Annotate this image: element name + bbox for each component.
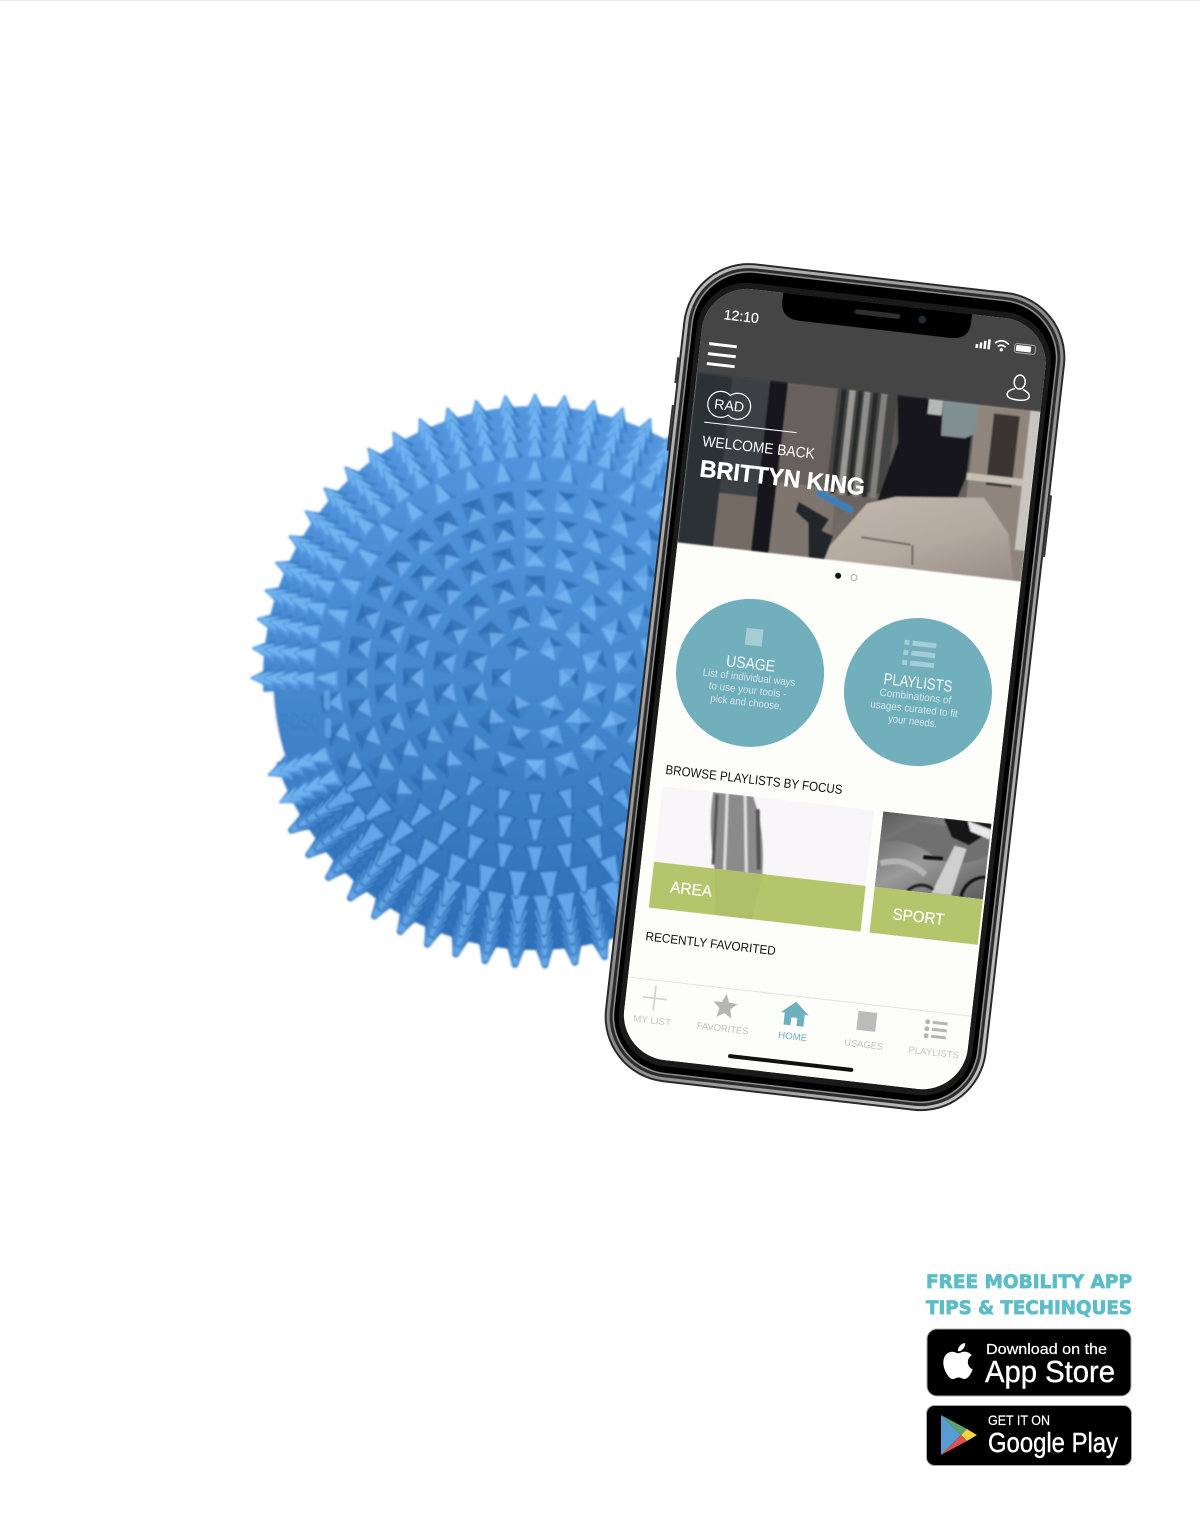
playlists circle — [844, 618, 992, 766]
tab: usages — [844, 1010, 887, 1053]
home indicator — [728, 1054, 853, 1072]
wifi icon — [994, 340, 1009, 351]
playlists heading: PLAYLISTS — [883, 671, 953, 696]
user name: BRITTYN KING — [698, 455, 866, 501]
tab: favorites: FAVORITES — [696, 1021, 749, 1037]
tab: home: HOME — [778, 1030, 808, 1044]
hamburger menu icon — [707, 342, 737, 368]
muscle illustration — [710, 792, 764, 874]
welcome text: WELCOME BACK — [701, 433, 816, 463]
recently favorited heading: RECENTLY FAVORITED — [645, 929, 777, 958]
signal icon — [975, 338, 991, 349]
speaker and camera — [854, 308, 927, 324]
badge large text: App Store — [985, 1354, 1115, 1389]
carousel dots — [835, 572, 857, 581]
playlists description — [870, 688, 958, 728]
usage description — [703, 668, 795, 710]
side buttons — [660, 357, 1063, 557]
playlists description: Combinations of — [879, 687, 952, 707]
sport green bar — [869, 887, 983, 945]
app promo heading — [926, 1271, 1132, 1319]
tab: favorites — [697, 994, 748, 1034]
ring at radius 178 — [347, 490, 723, 871]
playlists description: your needs. — [888, 713, 938, 730]
tab: my list: MY LIST — [633, 1013, 672, 1029]
playlists icon — [902, 640, 937, 668]
ring at radius 122 — [403, 546, 667, 815]
phone frame — [598, 256, 1072, 1118]
area card — [648, 786, 875, 933]
tab bar divider — [628, 977, 972, 1017]
upper and left cones — [250, 394, 713, 814]
cyclist photo — [879, 818, 992, 897]
screen background — [619, 284, 1051, 1094]
inner ring pyramids — [433, 576, 637, 780]
tab: playlists: PLAYLISTS — [908, 1045, 960, 1061]
profile icon — [1007, 374, 1032, 401]
App Store badge — [927, 1329, 1131, 1396]
usage heading: USAGE — [725, 653, 776, 676]
RAD logo: RAD — [713, 396, 745, 415]
usage icon — [745, 628, 764, 647]
ball body — [263, 406, 807, 950]
icon: play triangle — [941, 1415, 977, 1455]
hero photo — [677, 372, 1041, 582]
tab: playlists — [908, 1017, 963, 1061]
Google Play badge — [926, 1406, 1132, 1466]
battery icon — [1014, 343, 1036, 355]
status time: 12:10 — [723, 306, 760, 326]
badge small text: Download on the — [986, 1341, 1107, 1358]
sport card — [869, 811, 992, 945]
icon: apple logo — [943, 1343, 973, 1379]
ball brand text: BOSO — [280, 709, 320, 736]
notch — [782, 292, 972, 338]
flat brand band cutout — [235, 692, 286, 771]
smartphone — [596, 256, 1074, 1118]
area label: AREA — [669, 879, 713, 901]
area green bar — [648, 862, 867, 933]
bottom cones — [281, 781, 648, 969]
RAD logo — [706, 390, 752, 421]
welcome divider — [704, 422, 797, 433]
browse heading: BROWSE PLAYLISTS BY FOCUS — [665, 762, 844, 797]
app promo heading: TIPS & TECHINQUES — [926, 1297, 1132, 1319]
screen — [619, 278, 1051, 1094]
badge small text: GET IT ON — [988, 1412, 1050, 1428]
muscle ghost — [715, 868, 752, 920]
tab: usages: USAGES — [844, 1037, 884, 1053]
badge large text: Google Play — [988, 1427, 1118, 1458]
usage circle — [676, 598, 824, 747]
app promo heading: FREE MOBILITY APP — [926, 1271, 1132, 1293]
dark header bar — [697, 284, 1051, 413]
blue spiked massage ball — [235, 394, 807, 969]
raised bars — [324, 690, 331, 738]
ring at radius 205 — [316, 458, 688, 900]
tab: home — [778, 1000, 811, 1044]
usage description: to use your tools - — [708, 680, 787, 701]
usage description: pick and choose. — [710, 693, 783, 713]
tab: my list — [634, 986, 671, 1026]
ring at radius 150 — [375, 518, 695, 842]
playlists description: usages curated to fit — [870, 698, 958, 720]
sport label: SPORT — [892, 906, 945, 929]
usage description: List of individual ways — [702, 667, 796, 689]
